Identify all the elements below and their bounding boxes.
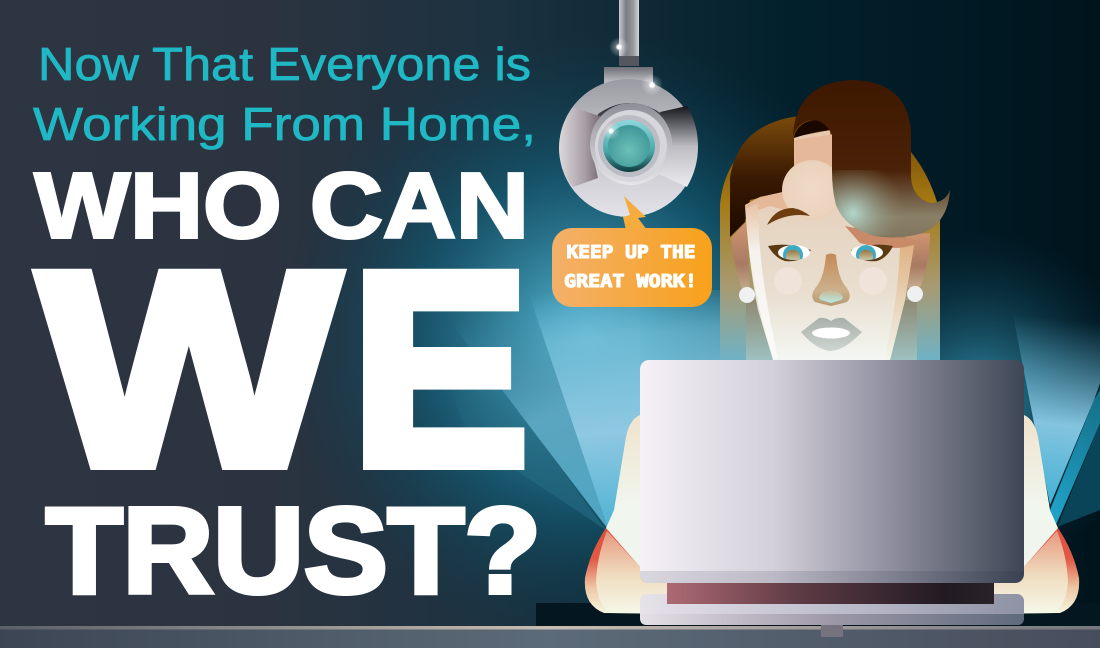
sparkles bbox=[602, 37, 663, 140]
left eye bbox=[768, 244, 811, 262]
camera right shell bbox=[657, 106, 698, 187]
left earring bbox=[739, 287, 755, 303]
hinge strip bbox=[667, 583, 994, 604]
temple shadow under fringe bbox=[845, 226, 914, 248]
left arm bbox=[606, 415, 640, 600]
laptop base bbox=[640, 594, 1024, 625]
cheeks bbox=[774, 267, 802, 295]
left ear shading bbox=[731, 222, 750, 292]
right eye bbox=[851, 244, 893, 262]
headline: we bbox=[40, 216, 529, 523]
laptop lid bbox=[640, 360, 1024, 583]
eyebrow bbox=[767, 208, 810, 225]
right ear shading bbox=[905, 233, 930, 288]
lens housing bbox=[590, 103, 672, 185]
dark hair left bbox=[730, 117, 800, 237]
dark floor band bbox=[536, 603, 1100, 627]
camera pole bbox=[619, 0, 639, 66]
forehead highlight bbox=[782, 160, 842, 220]
light rays right bbox=[1010, 300, 1100, 527]
desk bbox=[0, 625, 1100, 648]
headline: trust: TRUST? bbox=[46, 482, 541, 618]
forelock bbox=[793, 80, 950, 237]
speech bubble: GREAT WORK! bbox=[564, 271, 697, 292]
neck shadow left bbox=[746, 300, 776, 360]
left face highlight bbox=[746, 204, 778, 358]
surveillance camera bbox=[559, 0, 698, 217]
left sleeve and hand bbox=[585, 528, 700, 614]
camera body bbox=[559, 79, 697, 217]
headline: who can: WHO CAN bbox=[34, 154, 529, 258]
right sleeve and hand bbox=[960, 528, 1079, 614]
right earring bbox=[907, 286, 923, 302]
speech bubble bbox=[552, 196, 712, 307]
camera left shell bbox=[559, 107, 602, 187]
right face shade bbox=[884, 245, 914, 360]
bubble text: KEEP UP THE bbox=[566, 242, 696, 263]
right arm bbox=[1024, 415, 1058, 600]
back hair bbox=[720, 116, 940, 360]
subtitle line 2: Working From Home, bbox=[33, 98, 536, 150]
lips bbox=[801, 318, 862, 351]
title bbox=[33, 38, 541, 618]
nose bbox=[812, 254, 850, 306]
headline: we: E bbox=[351, 216, 529, 523]
lens bbox=[603, 120, 655, 172]
peach hairline shading bbox=[745, 134, 834, 214]
neck shadow right bbox=[888, 300, 917, 360]
laptop bbox=[640, 360, 1024, 625]
woman bbox=[585, 80, 1079, 614]
subtitle line 1: Now That Everyone is bbox=[38, 38, 531, 90]
light rays left bbox=[410, 280, 720, 530]
headline: we: W bbox=[40, 216, 341, 523]
dark hairline bbox=[794, 120, 831, 138]
camera neck bbox=[604, 67, 653, 87]
laptop stand bbox=[821, 625, 843, 637]
face bbox=[745, 130, 914, 360]
